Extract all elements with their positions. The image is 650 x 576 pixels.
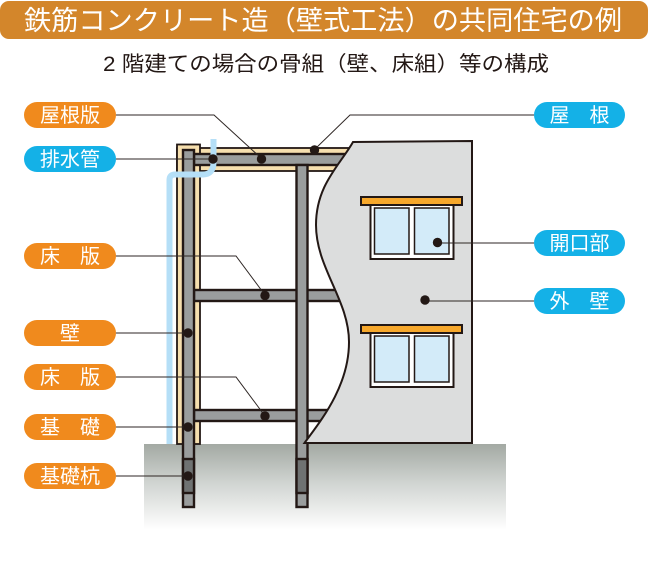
leader dots bbox=[183, 145, 442, 481]
lower window bbox=[361, 325, 462, 387]
label: 基礎: 基 礎 bbox=[40, 416, 100, 439]
title: 鉄筋コンクリート造（壁式工法）の共同住宅の例 bbox=[24, 6, 622, 36]
label: 排水管: 排水管 bbox=[40, 148, 100, 171]
left column bbox=[183, 150, 194, 507]
label: 屋根版: 屋根版 bbox=[40, 104, 100, 127]
label: 開口部: 開口部 bbox=[550, 232, 610, 255]
label: 開口部 bbox=[534, 230, 625, 256]
label: 排水管 bbox=[24, 146, 116, 172]
label: 床版 upper bbox=[24, 243, 116, 269]
label: 屋根版 bbox=[24, 102, 116, 128]
building wall bbox=[304, 141, 472, 443]
structural frame bbox=[177, 144, 352, 507]
lower floor slab bbox=[194, 410, 334, 421]
drain pipe bbox=[170, 139, 214, 444]
label: 床版 upper: 床 版 bbox=[40, 245, 100, 268]
label: 屋根 bbox=[534, 102, 625, 128]
label: 基礎 bbox=[24, 414, 116, 440]
ground bbox=[144, 444, 506, 530]
label: 基礎杭 bbox=[24, 463, 116, 489]
label: 壁 bbox=[24, 320, 116, 346]
subtitle: 2 階建ての場合の骨組（壁、床組）等の構成 bbox=[103, 53, 549, 76]
right column bbox=[296, 165, 308, 507]
upper floor slab bbox=[194, 290, 344, 301]
label: 壁: 壁 bbox=[60, 322, 80, 345]
label: 床版 lower bbox=[24, 364, 116, 390]
upper window bbox=[361, 197, 462, 259]
label: 基礎杭: 基礎杭 bbox=[40, 465, 100, 488]
label: 外壁: 外 壁 bbox=[550, 290, 610, 313]
leader lines bbox=[116, 115, 534, 476]
label: 床版 lower: 床 版 bbox=[40, 366, 100, 389]
label: 屋根: 屋 根 bbox=[550, 104, 610, 127]
roof slab bbox=[194, 154, 352, 165]
wall and roof tan layer bbox=[177, 144, 352, 444]
label: 外壁 bbox=[534, 288, 625, 314]
